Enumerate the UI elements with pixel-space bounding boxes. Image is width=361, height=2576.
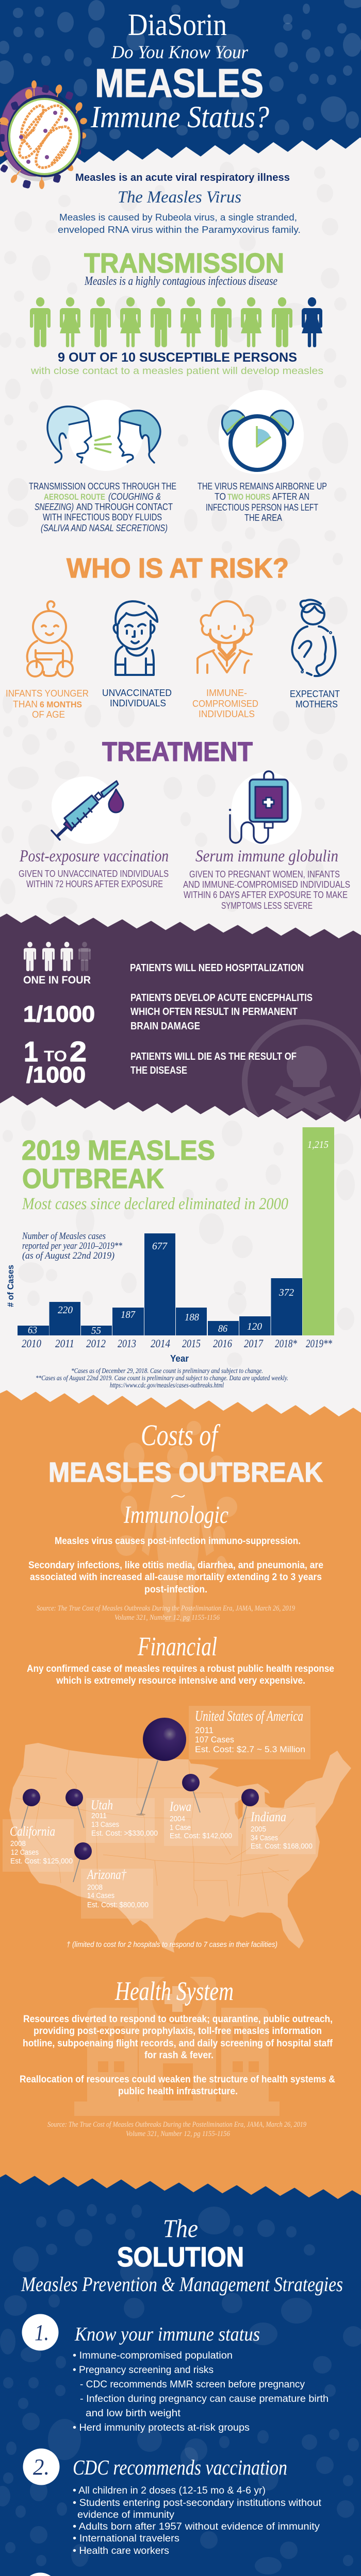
stat: 1/1000: 1/1000 bbox=[23, 1002, 95, 1027]
chart footnotes bbox=[36, 1367, 288, 1389]
heading: 2019 measles outbreak: OUTBREAK bbox=[22, 1163, 164, 1194]
watermark: human figure bbox=[116, 1421, 237, 1622]
risk group labels: UNVACCINATED bbox=[102, 688, 172, 698]
text: aerosol route: WITH INFECTIOUS BODY FLUIDS bbox=[43, 512, 162, 522]
text block: health system: Resources diverted to respond to outbreak; quarantine, public outreach, bbox=[23, 2014, 333, 2025]
strategy 2: CDC recommends vaccination bbox=[73, 2455, 287, 2479]
box: Utah: Utah bbox=[91, 1798, 113, 1812]
box: Utah: 2011 bbox=[91, 1811, 107, 1820]
text: aerosol route: AEROSOL ROUTE bbox=[44, 492, 105, 502]
text: two hours airborne: TWO HOURS bbox=[227, 492, 270, 502]
bar values: 120 bbox=[247, 1321, 262, 1332]
text block: health system bbox=[20, 1977, 335, 2138]
lakes bbox=[235, 1792, 285, 1820]
box: Utah: Est. Cost: >$330,000 bbox=[91, 1829, 158, 1838]
strategy 2: evidence of immunity bbox=[77, 2510, 175, 2520]
bar values: 63 bbox=[28, 1325, 37, 1336]
chart footnotes: https://www.cdc.gov/measles/cases-outbreaks.html bbox=[110, 1381, 224, 1389]
top blue header band bbox=[0, 0, 361, 165]
section heading: who is at risk: WHO IS AT RISK? bbox=[67, 553, 289, 584]
year labels: 2014 bbox=[151, 1337, 170, 1350]
stat: one in four bbox=[23, 962, 304, 986]
logo: DiaSorin: DiaSorin bbox=[128, 8, 227, 42]
stat: 1/1000: PATIENTS DEVELOP ACUTE ENCEPHALITIS bbox=[130, 992, 313, 1004]
title line 3: Immune Status? bbox=[90, 100, 269, 134]
icon: alarm clock bbox=[219, 390, 304, 474]
year labels: 2015 bbox=[182, 1337, 201, 1350]
box: Iowa: Iowa bbox=[169, 1799, 191, 1814]
text block: immunologic: Secondary infections, like otitis media, diarrhea, and pneumonia, are bbox=[28, 1560, 323, 1571]
year labels: 2019** bbox=[306, 1337, 332, 1350]
text: two hours airborne: INFECTIOUS PERSON HAS LEFT bbox=[206, 502, 318, 513]
map footnote: † (limited to cost for 2 hospitals to respond to 7 cases in their facilities) bbox=[67, 1940, 277, 1949]
text: serum immune globulin: Serum immune globulin bbox=[195, 847, 338, 866]
stat: 1 to 2 per 1000 bbox=[24, 1036, 297, 1088]
text block: immunologic: Source: The True Cost of Measles Outbreaks During the Postelimination Era, JAMA, March 26, 2019 bbox=[37, 1604, 295, 1613]
box: Iowa: Est. Cost: $142,000 bbox=[170, 1832, 232, 1840]
chart note: reported per year 2010–2019** bbox=[22, 1241, 122, 1251]
text block: immunologic: associated with increased all-cause mortality extending 2 to 3 years bbox=[30, 1572, 322, 1583]
box: United States of America: Est. Cost: $2.7 ~ 5.3 Million bbox=[195, 1744, 305, 1754]
text: aerosol route bbox=[29, 481, 176, 533]
stat: 1/1000: BRAIN DAMAGE bbox=[130, 1021, 200, 1032]
box: Iowa: 1 Case bbox=[170, 1823, 191, 1832]
year labels: 2012 bbox=[86, 1337, 106, 1350]
year labels: 2011 bbox=[55, 1337, 74, 1350]
state borders bbox=[15, 1750, 315, 1906]
box: Arizona: Arizona† bbox=[86, 1867, 127, 1882]
text: post-exposure vaccination: WITHIN 72 HOURS AFTER EXPOSURE bbox=[26, 879, 163, 889]
bar values: 372 bbox=[278, 1287, 294, 1298]
risk group labels: THAN bbox=[13, 699, 38, 709]
box: California: 2008 bbox=[10, 1839, 26, 1848]
number badge 1: 1. bbox=[35, 2320, 49, 2345]
text block: immunologic: Volume 321, Number 12, pg 1155-1156 bbox=[114, 1614, 220, 1622]
panel: complications (purple band) bbox=[0, 914, 361, 1144]
bars bbox=[18, 1127, 334, 1335]
heading: costs of measles outbreak: MEASLES OUTBREAK bbox=[48, 1457, 323, 1488]
box: Indiana: 34 Cases bbox=[251, 1834, 278, 1842]
heading: 2019 measles outbreak: Most cases since declared eliminated in 2000 bbox=[22, 1195, 288, 1213]
box: California bbox=[3, 1819, 74, 1872]
bar values: 55 bbox=[91, 1325, 101, 1336]
chart footnotes: **Cases as of August 22nd 2019. Case count is preliminary and subject to change. Data are updated weekly. bbox=[36, 1374, 288, 1382]
intro text block bbox=[58, 172, 301, 235]
number badge 2: 2. bbox=[33, 2454, 50, 2480]
icon: syringe bbox=[52, 776, 123, 844]
number badge 2 bbox=[23, 2448, 60, 2485]
x axis title: Year bbox=[170, 1353, 189, 1364]
strategy 1: Know your immune status bbox=[74, 2324, 260, 2345]
text: aerosol route: TRANSMISSION OCCURS THROUGH THE bbox=[29, 481, 176, 492]
text block: health system: public health infrastructure. bbox=[118, 2086, 238, 2097]
text block: immunologic bbox=[28, 1501, 323, 1622]
chart note bbox=[22, 1231, 122, 1261]
stat: one in four: ONE IN FOUR bbox=[23, 974, 91, 986]
stat: 1/1000: WHICH OFTEN RESULT IN PERMANENT bbox=[130, 1006, 298, 1018]
text block: financial: Financial bbox=[137, 1632, 217, 1662]
bar chart: measles cases by year bbox=[6, 1127, 334, 1364]
text: post-exposure vaccination: Post-exposure vaccination bbox=[19, 847, 169, 866]
risk group labels: IMMUNE- bbox=[206, 688, 247, 698]
chart note: Number of Measles cases bbox=[22, 1231, 106, 1242]
risk group labels: COMPROMISED bbox=[192, 699, 258, 709]
chart note: (as of August 22nd 2019) bbox=[22, 1250, 114, 1261]
intro text block: Measles is an acute viral respiratory illness bbox=[75, 172, 290, 183]
stat: 1 to 2 per 1000: TO bbox=[44, 1048, 67, 1065]
stat: 1/1000 bbox=[23, 992, 313, 1032]
section heading: transmission: TRANSMISSION bbox=[84, 248, 284, 279]
text block: health system: hotline, subpoenaing flight records, and daily screening of hospital staff bbox=[23, 2038, 333, 2049]
stat: one in four: PATIENTS WILL NEED HOSPITALIZATION bbox=[130, 962, 304, 974]
box: United States of America: 107 Cases bbox=[195, 1735, 234, 1744]
blob pattern: header bbox=[0, 0, 361, 149]
risk group labels: MOTHERS bbox=[296, 699, 338, 709]
text block: health system: providing post-exposure prophylaxis, toll-free measles information bbox=[34, 2026, 322, 2037]
strategy 1: • Immune-compromised population bbox=[73, 2350, 233, 2361]
strategy 1: and low birth weight bbox=[86, 2408, 181, 2419]
box: Arizona: 14 Cases bbox=[87, 1891, 114, 1900]
year labels: 2016 bbox=[213, 1337, 232, 1350]
map: United States outbreak costs bbox=[3, 1706, 351, 1953]
box: Utah bbox=[86, 1798, 158, 1843]
number badge 3 bbox=[22, 2573, 59, 2576]
text block: health system: Reallocation of resources could weaken the structure of health systems & bbox=[20, 2074, 335, 2085]
year labels: 2013 bbox=[118, 1337, 136, 1350]
bar values: 188 bbox=[185, 1312, 199, 1323]
bar values bbox=[28, 1139, 329, 1336]
bar values: 677 bbox=[152, 1241, 168, 1252]
strategy 2: • Adults born after 1957 without evidence of immunity bbox=[73, 2521, 320, 2532]
box: Indiana: Indiana bbox=[250, 1809, 286, 1824]
box: United States of America bbox=[189, 1706, 310, 1759]
stat: 1 to 2 per 1000: PATIENTS WILL DIE AS THE RESULT OF bbox=[130, 1051, 297, 1062]
text: aerosol route: (COUGHING & bbox=[108, 492, 161, 502]
panel: costs of measles outbreak (orange band) bbox=[0, 1391, 361, 2215]
risk group labels: INFANTS YOUNGER bbox=[6, 688, 89, 699]
risk group labels bbox=[6, 688, 340, 720]
icon: elderly person bbox=[198, 601, 253, 673]
icon: two heads talking bbox=[47, 400, 160, 471]
number badge 1 bbox=[22, 2314, 59, 2350]
title line 2: MEASLES bbox=[95, 60, 264, 106]
icon: skull watermark bbox=[242, 1019, 361, 1121]
icon: expectant mother bbox=[292, 600, 336, 676]
pictogram: one in four bbox=[24, 942, 91, 971]
box: Arizona bbox=[81, 1867, 153, 1919]
heading: costs of measles outbreak bbox=[48, 1418, 323, 1498]
box: Iowa bbox=[164, 1798, 238, 1846]
strategy 2 bbox=[23, 2448, 322, 2556]
heading: the solution: SOLUTION bbox=[117, 2242, 244, 2273]
bar values: 86 bbox=[218, 1323, 227, 1334]
year labels: 2017 bbox=[244, 1337, 264, 1350]
text block: financial bbox=[27, 1632, 334, 1686]
text: aerosol route: SNEEZING) bbox=[35, 502, 74, 512]
risk group labels: EXPECTANT bbox=[290, 689, 340, 699]
intro text block: enveloped RNA virus within the Paramyxovirus family. bbox=[58, 225, 301, 235]
text: serum immune globulin bbox=[183, 847, 350, 911]
map pins bbox=[22, 1718, 259, 1882]
text: serum immune globulin: SYMPTOMS LESS SEVERE bbox=[221, 901, 313, 911]
icon: young person bbox=[113, 601, 157, 675]
panel: the solution (blue band) bbox=[0, 2175, 361, 2576]
risk group labels: OF AGE bbox=[32, 709, 65, 720]
chart footnotes: *Cases as of December 29, 2018. Case count is preliminary and subject to change. bbox=[71, 1367, 263, 1375]
text: two hours airborne: THE AREA bbox=[244, 513, 282, 523]
bar values: 220 bbox=[58, 1304, 73, 1316]
strategy 1: • Pregnancy screening and risks bbox=[73, 2365, 214, 2376]
box: California: Est. Cost: $125,000 bbox=[10, 1857, 73, 1866]
heading: costs of measles outbreak: Costs of bbox=[141, 1418, 220, 1452]
icon: measles virus bbox=[0, 80, 88, 189]
text: post-exposure vaccination: GIVEN TO UNVACCINATED INDIVIDUALS bbox=[19, 869, 169, 879]
US outline bbox=[9, 1743, 351, 1953]
heading: 2019 measles outbreak bbox=[22, 1135, 288, 1213]
text block: health system: Volume 321, Number 12, pg 1155-1156 bbox=[126, 2130, 230, 2138]
text: aerosol route: AND THROUGH CONTACT bbox=[76, 502, 173, 512]
text: two hours airborne: TO bbox=[215, 492, 226, 502]
text block: immunologic: post-infection. bbox=[144, 1584, 207, 1595]
risk group labels: INDIVIDUALS bbox=[110, 698, 166, 708]
heading: the solution bbox=[21, 2214, 343, 2296]
strategy 2: • All children in 2 doses (12-15 mo & 4-6 yr) bbox=[73, 2485, 266, 2496]
box: Indiana: Est. Cost: $168,000 bbox=[251, 1842, 313, 1851]
text block: health system: Health System bbox=[114, 1977, 234, 2006]
stat: 1 to 2 per 1000: /1000 bbox=[26, 1062, 86, 1088]
strategy 2: • International travelers bbox=[73, 2533, 179, 2544]
watermark: hospital bbox=[74, 1974, 280, 2116]
year labels bbox=[22, 1337, 332, 1350]
stat: 9 out of 10: with close contact to a measles patient will develop measles bbox=[30, 366, 323, 377]
box: California: California bbox=[10, 1824, 55, 1839]
box: Iowa: 2004 bbox=[170, 1815, 185, 1823]
strategy 2: • Health care workers bbox=[73, 2546, 169, 2556]
strategy 1: • Herd immunity protects at-risk groups bbox=[73, 2422, 250, 2433]
box: California: 12 Cases bbox=[11, 1848, 39, 1857]
strategy 2: • Students entering post-secondary institutions without bbox=[73, 2498, 322, 2509]
stat: 9 out of 10 bbox=[30, 350, 323, 377]
text: post-exposure vaccination bbox=[19, 847, 169, 889]
year labels: 2018* bbox=[275, 1337, 297, 1350]
text: two hours airborne: THE VIRUS REMAINS AIRBORNE UP bbox=[198, 481, 327, 492]
blob pattern: solution bbox=[0, 2204, 361, 2576]
text: two hours airborne bbox=[198, 481, 327, 523]
text block: health system: for rash & fever. bbox=[144, 2050, 214, 2061]
y axis title: # of Cases bbox=[6, 1265, 15, 1307]
icon: IV bag bbox=[229, 771, 302, 845]
header: brand and title bbox=[90, 8, 269, 134]
bar values: 187 bbox=[121, 1309, 136, 1320]
divider tilde bbox=[171, 1495, 185, 1498]
pale blob pattern: upper section bbox=[0, 162, 348, 916]
heading: the solution: The bbox=[163, 2214, 198, 2243]
year labels: 2010 bbox=[22, 1337, 41, 1350]
box: Arizona: Est. Cost: $800,000 bbox=[87, 1901, 149, 1909]
text block: immunologic: Immunologic bbox=[123, 1501, 228, 1529]
pictogram: 9 of 10 persons bbox=[30, 297, 322, 347]
strategy 1 bbox=[22, 2314, 329, 2433]
strategy 1: - CDC recommends MMR screen before pregnancy bbox=[80, 2379, 305, 2390]
stat: 1 to 2 per 1000: 1 bbox=[24, 1036, 38, 1067]
risk group labels: 6 MONTHS bbox=[40, 700, 82, 709]
text block: immunologic: Measles virus causes post-infection immuno-suppression. bbox=[55, 1536, 301, 1547]
text block: financial: Any confirmed case of measles requires a robust public health response bbox=[27, 1664, 334, 1674]
pale blob pattern: chart section bbox=[3, 1110, 355, 1368]
strategy 1: - Infection during pregnancy can cause premature birth bbox=[80, 2394, 329, 2404]
stat: 1 to 2 per 1000: 2 bbox=[70, 1036, 87, 1067]
text block: health system: Source: The True Cost of Measles Outbreaks During the Postelimination Era, JAMA, March 26, 2019 bbox=[47, 2121, 306, 2129]
text: two hours airborne: AFTER AN bbox=[272, 492, 309, 502]
icon: infant bbox=[27, 601, 73, 676]
stat: 9 out of 10: 9 OUT OF 10 SUSCEPTIBLE PERSONS bbox=[58, 350, 297, 365]
box: United States of America: 2011 bbox=[195, 1725, 214, 1735]
box: Arizona: 2008 bbox=[87, 1883, 103, 1892]
risk group labels: INDIVIDUALS bbox=[199, 709, 255, 719]
intro text block: Measles is caused by Rubeola virus, a single stranded, bbox=[59, 212, 297, 223]
box: Utah: 13 Cases bbox=[91, 1820, 119, 1829]
strategy 3 bbox=[22, 2573, 334, 2576]
section heading: transmission: Measles is a highly contagious infectious disease bbox=[84, 275, 277, 288]
title line 1: Do You Know Your bbox=[111, 42, 249, 62]
text block: financial: which is extremely resource intensive and very expensive. bbox=[56, 1675, 305, 1686]
intro text block: The Measles Virus bbox=[118, 188, 241, 207]
text: aerosol route: (SALIVA AND NASAL SECRETIONS) bbox=[41, 523, 168, 533]
box: United States of America: United States of America bbox=[195, 1708, 303, 1724]
box: Indiana bbox=[246, 1807, 316, 1854]
bar values: 1,215 bbox=[307, 1139, 329, 1150]
heading: 2019 measles outbreak: 2019 MEASLES bbox=[22, 1135, 215, 1166]
section heading: treatment: TREATMENT bbox=[102, 737, 253, 767]
stat: 1 to 2 per 1000: THE DISEASE bbox=[130, 1065, 187, 1076]
box: Indiana: 2005 bbox=[251, 1825, 266, 1834]
